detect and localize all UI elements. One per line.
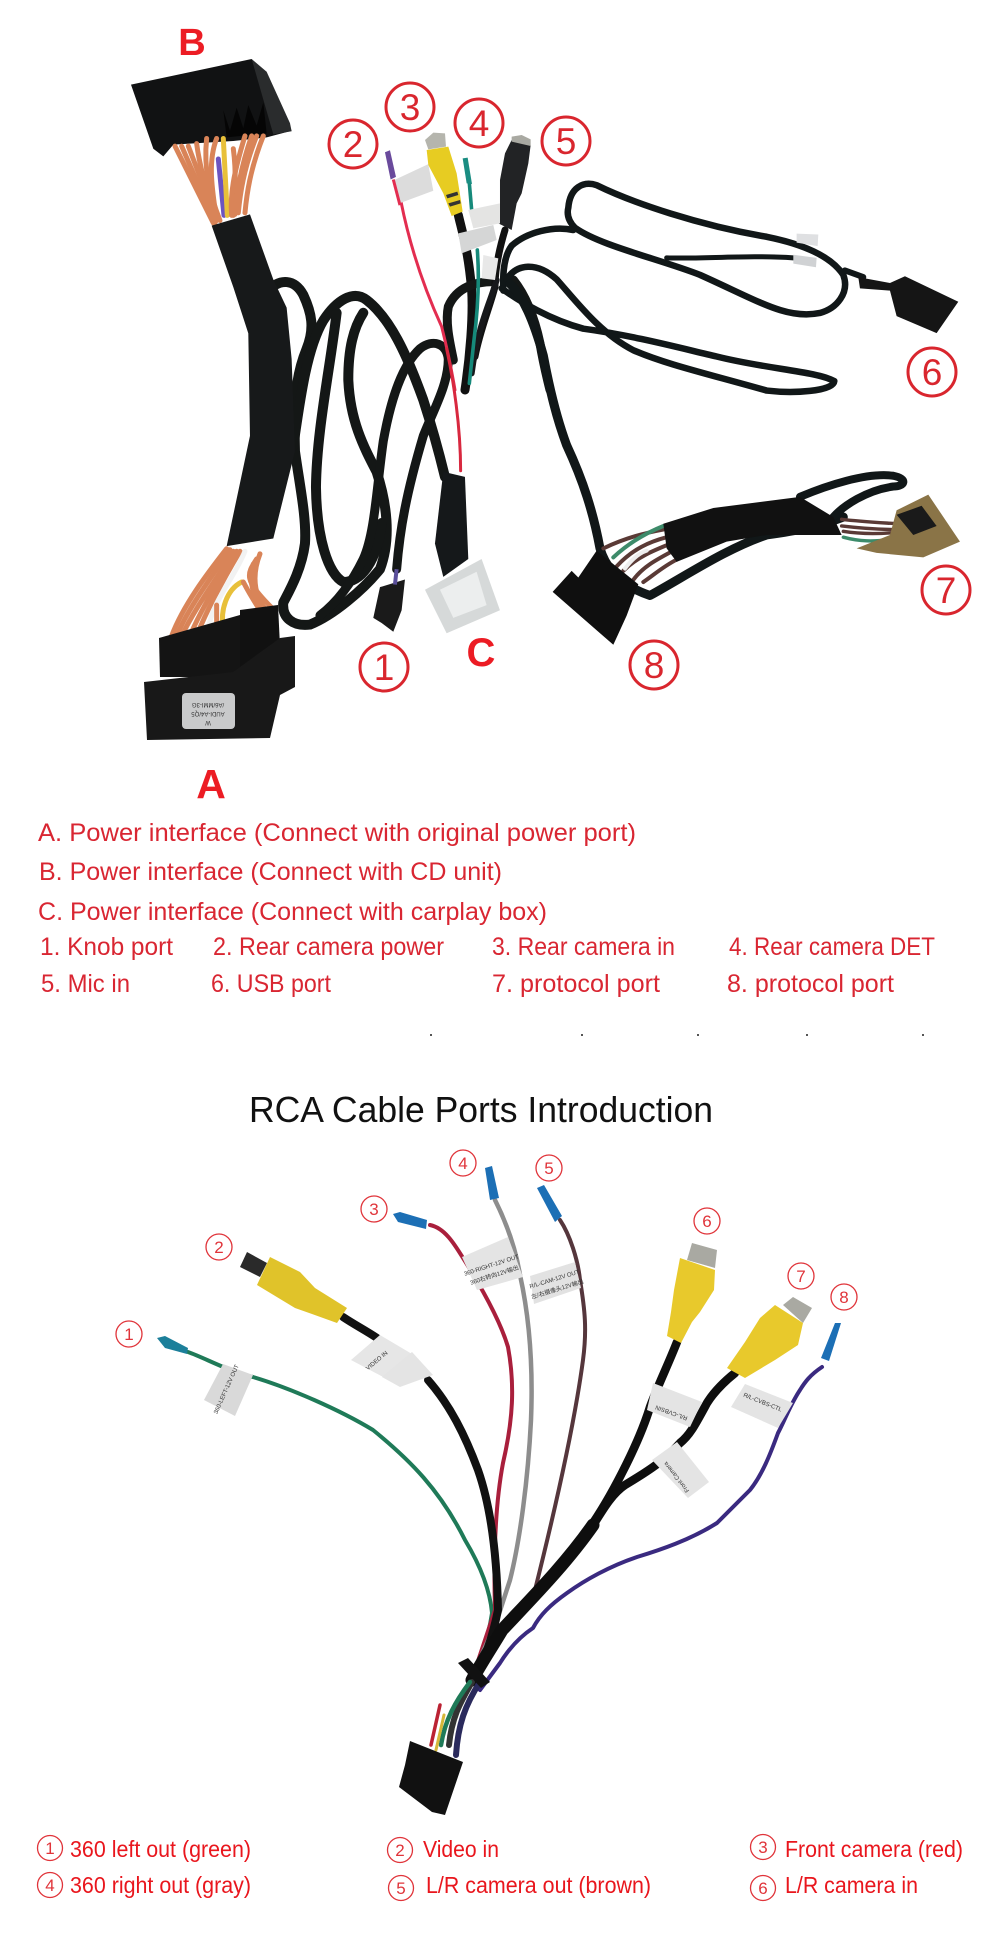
connector 1: knob port [373,569,405,632]
text block: harness legend: 2. Rear camera power [213,933,444,961]
wire tags [204,1237,793,1498]
port 2 tip and tag [385,150,433,205]
label: letter B: B [178,22,206,64]
text block: RCA legend [38,1834,963,1900]
wire tags: 左/右摄像头12V输出 [530,1277,585,1301]
USB cable loops [502,184,903,595]
port 4 tip [463,158,472,184]
callouts on RCA photo: 2 [214,1238,224,1257]
callout 2 [329,120,377,168]
callouts on RCA photo: 7 [796,1267,806,1286]
connector A: AUDI-A4/Q5 [191,710,225,716]
connector 7 [857,495,960,557]
wire 1 green [188,1352,492,1677]
text block: harness legend: 3. Rear camera in [492,933,675,961]
text block: harness legend: 5. Mic in [41,970,130,998]
connector A: /A6/MMI-3G [192,701,224,707]
callout 8: 8 [644,645,664,686]
callout 3: 3 [400,87,420,128]
callouts on RCA photo: 5 [544,1159,554,1178]
callout 5 [542,117,590,165]
orange wires from connector B [175,136,263,223]
panel: harness photo [131,59,960,740]
wire tags: R/L-CVBS-CTL [742,1393,783,1414]
callout 6 [908,348,956,396]
text block: RCA legend: Front camera (red) [785,1836,963,1862]
wire 5 brown [505,1220,585,1625]
callouts on RCA photo: 1 [124,1325,134,1344]
callout 4 [455,99,503,147]
text block: harness legend: A. Power interface (Connect with original power port) [38,819,636,847]
callout 7 [922,566,970,614]
wire tags: 360-RIGHT-12V OUT [463,1254,520,1278]
wire tags: R/L-CVBSIN [655,1403,689,1421]
wire tags: R/L-CAM-12V OUT [529,1270,581,1290]
wire tags: Front Camera [663,1460,691,1493]
text block: RCA legend: 360 right out (gray) [70,1872,251,1898]
callout 3 [386,83,434,131]
panel: RCA cable photo [157,1166,841,1815]
braided cable loops [267,282,448,625]
wire tags: 360右转向12V输出 [469,1263,520,1287]
text block: RCA legend: L/R camera out (brown) [426,1872,651,1898]
text block: harness legend: B. Power interface (Connect with CD unit) [39,858,502,886]
protocol sleeve [663,497,842,562]
text block: RCA legend: 360 left out (green) [70,1836,251,1862]
sleeve and connector C [425,472,500,633]
wire tags: VIDEO IN [365,1350,389,1372]
plug 7 [727,1297,812,1378]
text block: RCA legend: 5 [396,1879,406,1898]
wire 2 black [343,1317,498,1680]
plug 2 video [240,1252,347,1323]
wire tags: 360-LEFT-12V OUT [213,1364,241,1415]
callouts on RCA photo [116,1150,857,1347]
wire 4 gray [475,1200,532,1670]
label: letter A: A [196,761,226,807]
text block: RCA legend: 6 [758,1879,768,1898]
text block: RCA legend: Video in [423,1836,499,1862]
zip tie [458,1658,490,1688]
wires at centre: red, green, black [401,183,550,390]
callouts on RCA photo: 3 [369,1200,379,1219]
text block: harness legend: 1. Knob port [40,933,173,961]
connector bottom [399,1741,463,1815]
text block: RCA legend: 1 [45,1839,55,1858]
text block: RCA legend: 4 [45,1876,55,1895]
text block: RCA legend: 2 [395,1841,405,1860]
callout 7: 7 [936,570,956,611]
text block: harness legend: C. Power interface (Connect with carplay box) [38,898,547,926]
connector A [144,605,295,740]
callout 1 [360,643,408,691]
wires 6 and 7 black [472,1342,735,1680]
plug 6 [667,1243,717,1343]
red wire lower [447,349,461,471]
text block: harness legend: 6. USB port [211,970,331,998]
wire 3 red [430,1225,512,1670]
label: letter C: C [467,631,495,675]
callout 2: 2 [343,124,363,165]
text block: RCA legend: L/R camera in [785,1872,918,1898]
callouts on RCA photo: 8 [839,1288,849,1307]
blue wire tips [157,1166,841,1361]
text block: harness legend [38,819,935,998]
text block: harness legend: 4. Rear camera DET [729,933,935,961]
callout 6: 6 [922,352,942,393]
callout 1: 1 [374,647,394,688]
connector 6 USB [793,234,958,333]
main sleeve [212,214,295,546]
callouts on RCA photo: 6 [702,1212,712,1231]
brown wires to connector 8 [603,526,677,582]
text block: RCA legend: 3 [758,1838,768,1857]
callouts on RCA photo: 4 [458,1154,468,1173]
wire 8 purple [480,1367,822,1690]
port 3 RCA plug [425,133,463,216]
orange wires to connector A [172,549,272,638]
port 5 mic plug [498,135,531,230]
cable labels at centre [458,203,500,280]
text block: harness legend: 7. protocol port [492,970,660,998]
connector B [131,59,292,156]
coloured wires into connector [431,1682,480,1755]
connector 8 [553,551,638,645]
brown wires to connector 7 [842,519,897,541]
text block: harness legend: 8. protocol port [727,970,894,998]
callout 4: 4 [469,103,489,144]
heading: RCA section: RCA Cable Ports Introduction [249,1089,713,1130]
callout 5: 5 [556,121,576,162]
connector A: W [205,719,211,725]
callout 8 [630,641,678,689]
